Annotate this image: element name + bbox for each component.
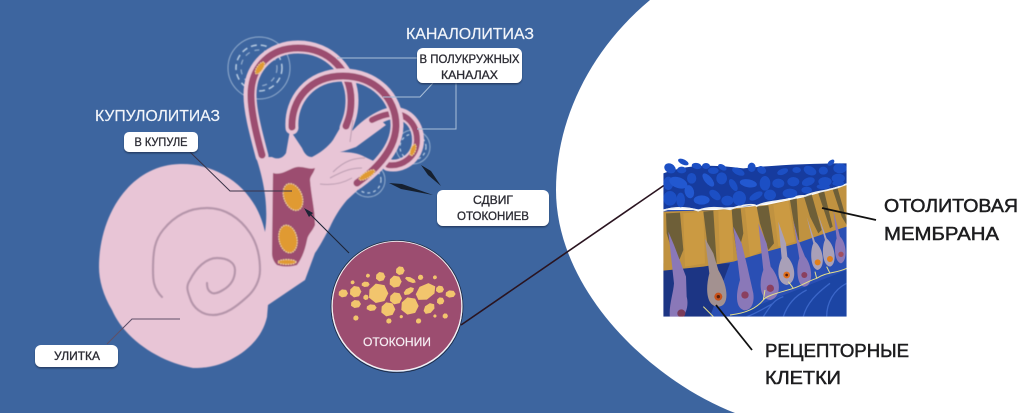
receptor cells [668, 210, 846, 318]
pointer line: receptor cells [716, 305, 752, 350]
cochlear spiral [153, 208, 260, 315]
semicircular canal 2 [292, 75, 397, 183]
label: otolith membrane: ОТОЛИТОВАЯ [884, 195, 1018, 216]
tissue background [663, 210, 847, 317]
callout: otoconia shift: СДВИГ [473, 195, 514, 207]
cell nuclei [677, 252, 844, 317]
leader line: cochlea [107, 319, 180, 344]
inner ear illustration [99, 37, 430, 368]
heading: cupulolithiasis: КУПУЛОЛИТИАЗ [95, 108, 220, 125]
otoconia crystals [339, 266, 456, 324]
callout: in the cupula: В КУПУЛЕ [134, 137, 188, 149]
label: receptor cells: РЕЦЕПТОРНЫЕ [765, 340, 909, 361]
callout: in the canals [417, 48, 522, 83]
cupula otoconia masses [276, 181, 307, 264]
gold membrane columns [663, 185, 847, 271]
arrow: shift to canal 2 [389, 183, 433, 195]
arrow to otoconia sac [304, 208, 349, 253]
nerve fibre layer [730, 270, 847, 317]
callout: otoconia shift [437, 190, 549, 226]
crystal backing layer [663, 163, 847, 209]
connector line to membrane image [461, 184, 666, 325]
leader line: cupula [190, 152, 292, 191]
callout: in the canals: В ПОЛУКРУЖНЫХ [420, 54, 520, 66]
callout: otoconia shift: ОТОКОНИЕВ [457, 211, 529, 223]
callout: cochlea: УЛИТКА [54, 351, 100, 363]
swirl marks [228, 37, 430, 197]
label: receptor cells: КЛЕТКИ [765, 367, 841, 388]
callout: in the cupula [124, 132, 198, 152]
heading: canalolithiasis: КАНАЛОЛИТИАЗ [406, 26, 534, 43]
utricle sac [272, 167, 315, 266]
label: otolith membrane: МЕМБРАНА [884, 223, 1000, 244]
semicircular canal 1 [250, 47, 352, 156]
white tectorial edge [663, 184, 847, 211]
cochlea and vestibule body [99, 117, 386, 368]
callout: in the canals: КАНАЛАХ [441, 70, 498, 82]
leader lines to canals [337, 58, 456, 129]
otoconia label: ОТОКОНИИ [363, 335, 431, 349]
otoconia circle [331, 240, 463, 372]
pointer line: otolith membrane [822, 208, 876, 220]
vestibule folds [320, 120, 365, 185]
membrane micro illustration [662, 157, 847, 318]
yellow nerve fibres [703, 267, 847, 317]
callout: cochlea [35, 345, 118, 367]
semicircular canal 3 [355, 113, 418, 166]
white panel [556, 0, 1024, 413]
arrow: shift to canal 3 [421, 165, 441, 186]
blue otolith crystals [662, 157, 847, 207]
canal debris [254, 61, 417, 182]
